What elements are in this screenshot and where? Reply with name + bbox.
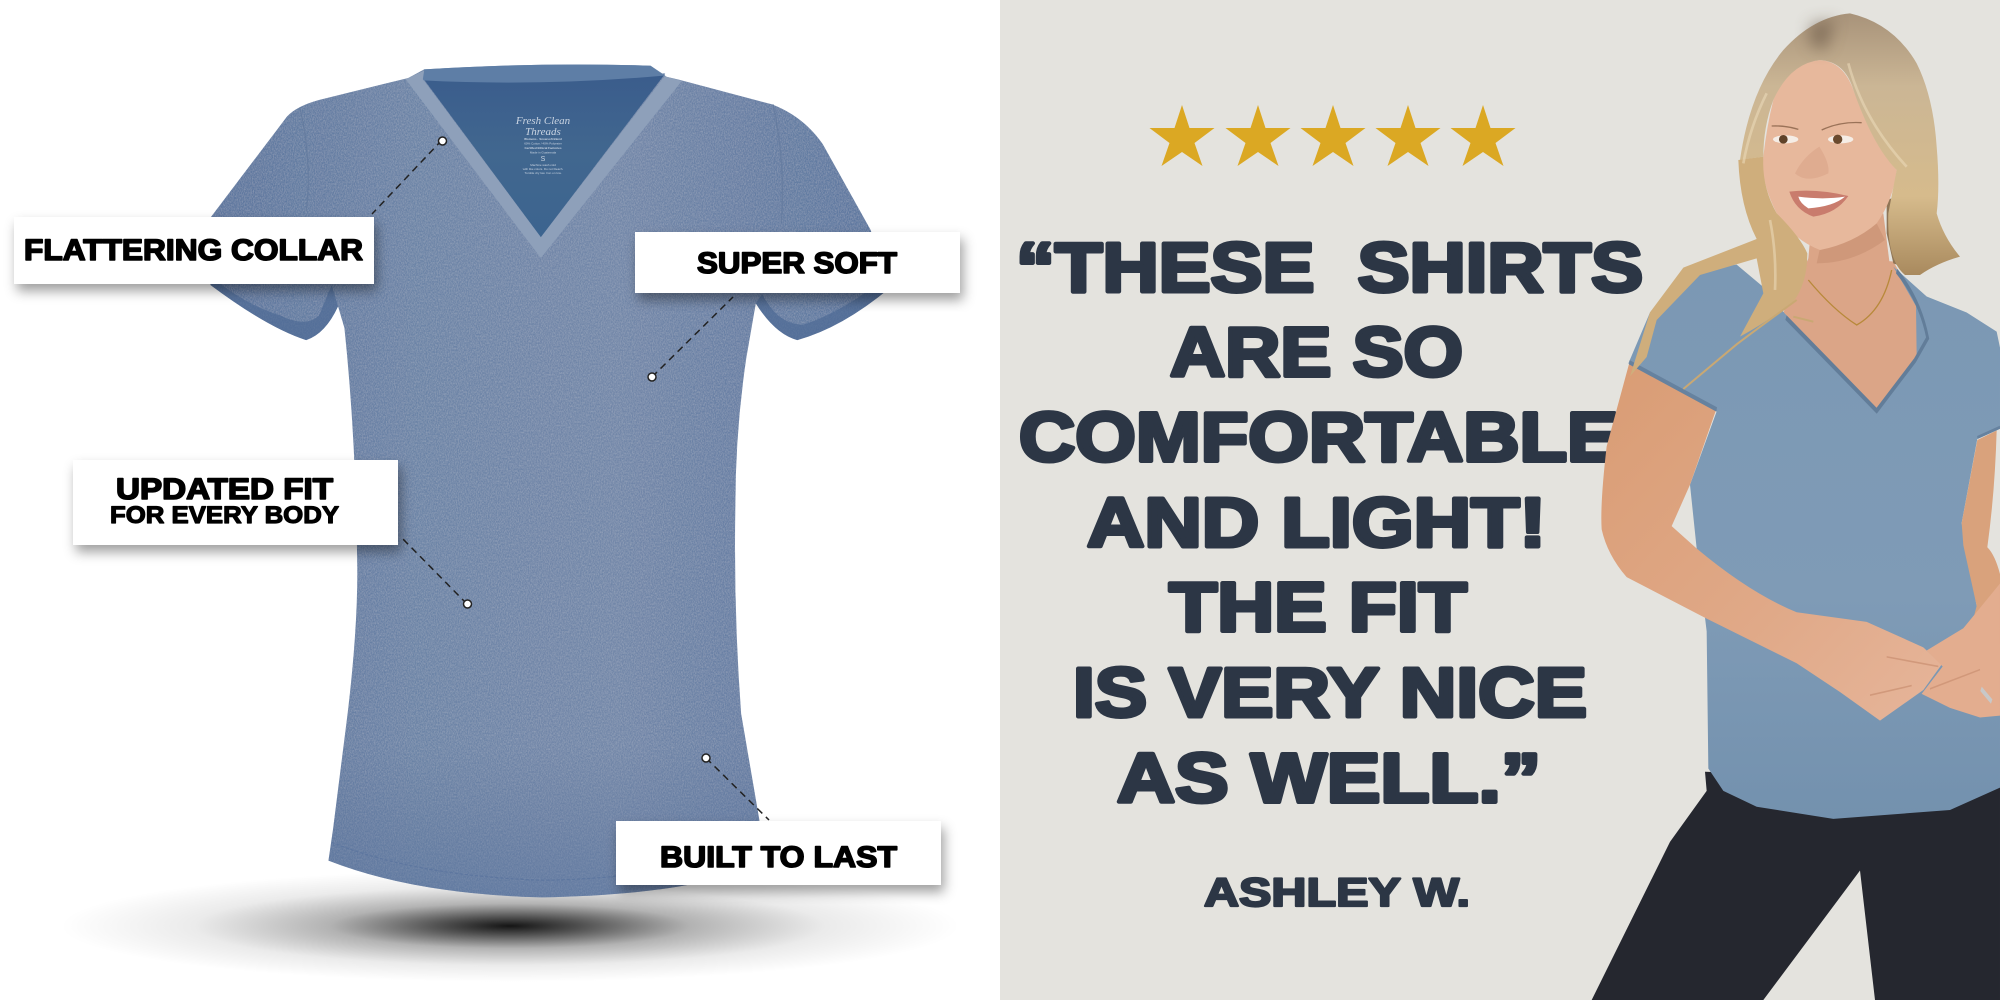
shirt body and sleeves [210,64,890,897]
inside of neck [423,72,665,237]
smile [1789,191,1848,217]
testimonial quote: THE FIT [1169,568,1467,646]
label: super soft [635,232,960,293]
neck tag print: Womens · Snowsoft Blend [524,137,562,141]
hair: left side and windblown lock [1630,157,1807,376]
finger lines [1870,657,1980,695]
label: flattering collar [14,217,374,284]
pointer: fit [400,536,472,608]
label: super soft: SUPER SOFT [697,247,897,280]
sleeve hem [1629,362,1717,409]
label: updated fit: UPDATED FIT [116,473,333,506]
t-shirt on model [1628,265,2000,819]
neck tag print: with like colors. Do not bleach. [523,167,563,171]
neck tag print: Threads [525,126,561,138]
label: flattering collar: FLATTERING COLLAR [24,234,363,267]
neck tag print: S [541,156,546,163]
head and hair [1630,13,1960,389]
star 2 [1226,105,1290,166]
neck shadow [1817,223,1885,263]
neck [1807,213,1897,300]
testimonial quote: AS WELL.” [1117,739,1541,817]
sleeve seams [300,104,782,224]
right arm [1962,430,2000,644]
label: built to last [616,821,941,885]
loose strands [1683,300,1813,389]
t-shirt illustration [210,64,890,897]
star 3 [1300,105,1366,166]
panel: testimonial background [1000,0,2000,1000]
photo: smiling woman in blue v-neck [1592,13,2000,1000]
hem stitching [332,842,762,880]
floor shadow under shirt [60,870,960,982]
back hair [1887,187,1937,273]
neck tag print [515,115,571,175]
nose [1795,147,1829,179]
five star rating [1150,105,1516,166]
neck tag print: 60% Cotton / 40% Polyester [524,142,562,146]
neck tag print: Made in Guatemala [530,150,556,154]
hair part shadow [1810,20,1835,50]
body of model [1592,255,2000,1000]
hair: crown and right side [1740,13,1960,275]
right hand [1922,584,2000,717]
ring [1981,689,1992,702]
neck tag print: Fresh Clean [515,115,571,127]
label: updated fit: FOR EVERY BODY [110,502,339,529]
hem and lower shading [328,561,765,897]
reviewer name: ASHLEY W. [1204,871,1470,915]
testimonial quote: IS VERY NICE [1073,654,1587,732]
collar band [406,67,682,258]
neck tag print: Machine wash cold [530,163,556,167]
testimonial quote: AND LIGHT! [1087,484,1546,562]
neck tag print: Certified Ethical Factories [524,146,562,150]
back neck band [422,64,665,83]
hair highlights [1743,63,1907,290]
callout lines and dots [372,137,769,820]
testimonial quote [1016,228,1643,817]
jeans [1592,772,2000,1000]
right sleeve hem [1977,427,2000,438]
testimonial quote: COMFORTABLE [1019,398,1619,476]
pointer: last [702,754,769,820]
label: built to last: BUILT TO LAST [660,841,897,874]
neck tag print: Tumble dry low. Iron on low. [524,171,562,175]
pointer: collar [372,137,446,214]
necklace [1808,270,1892,325]
face [1763,60,1897,250]
star 5 [1450,105,1516,166]
pointer: soft [648,297,733,381]
chest skin [1783,255,1918,411]
eyebrows [1772,122,1862,130]
left sleeve underside [210,276,338,340]
right sleeve underside [756,276,890,340]
eyes [1773,135,1853,144]
testimonial quote: “THESE SHIRTS [1016,228,1643,306]
panel: product diagram background [0,0,1000,1000]
star 1 [1150,105,1214,166]
label: updated fit [73,460,398,545]
v-neck trim [1786,271,1928,411]
testimonial quote: ARE SO [1170,313,1463,391]
star 4 [1376,105,1440,166]
left arm [1601,360,1942,721]
